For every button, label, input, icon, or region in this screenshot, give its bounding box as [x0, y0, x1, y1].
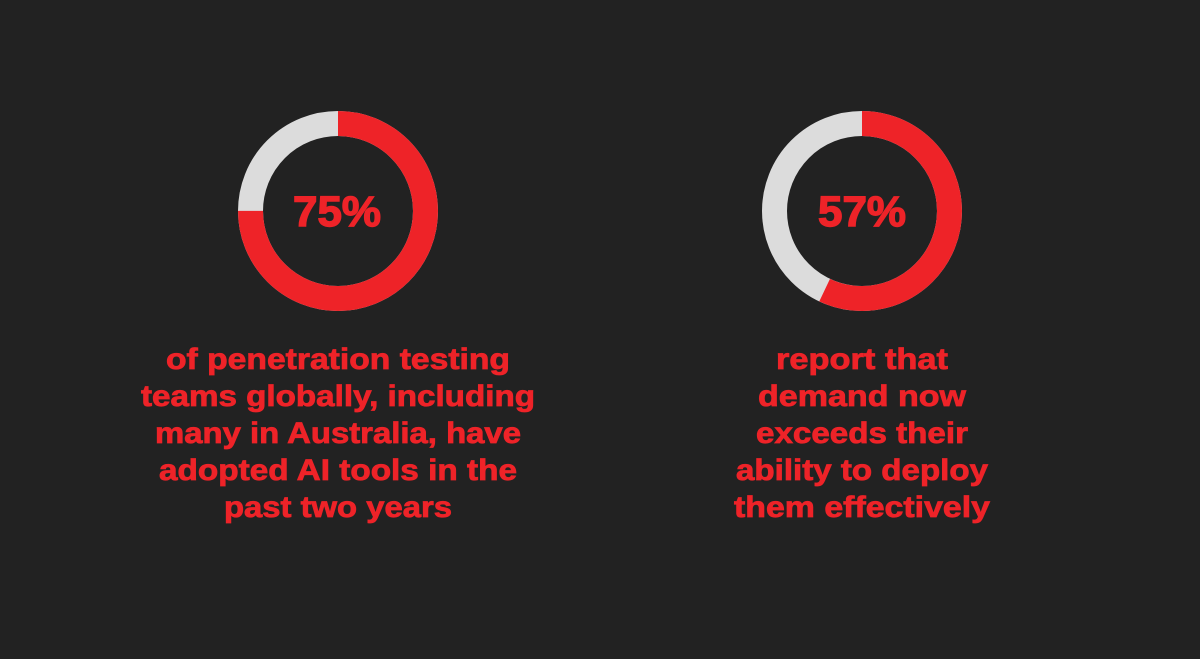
value: 57%: 57%	[818, 188, 906, 236]
description: 57% statistic: ability to deploy	[736, 454, 988, 487]
description: 75% statistic: adopted AI tools in the	[159, 454, 517, 487]
description: 75% statistic: teams globally, including	[141, 380, 535, 413]
description: 75% statistic: of penetration testing	[166, 343, 510, 376]
description: 57% statistic: report that	[776, 343, 948, 376]
value: 75%: 75%	[293, 188, 381, 236]
donut chart: 57%	[774, 124, 950, 298]
description: 57% statistic: demand now	[758, 380, 967, 413]
description: 75% statistic: many in Australia, have	[155, 417, 521, 450]
description: 75% statistic: past two years	[224, 491, 452, 524]
description: 75% statistic	[141, 343, 535, 524]
panel: 57 percent statistic	[734, 124, 990, 524]
panel: 75 percent statistic	[141, 124, 535, 524]
description: 57% statistic: exceeds their	[756, 417, 968, 450]
description: 57% statistic: them effectively	[734, 491, 990, 524]
description: 57% statistic	[734, 343, 990, 524]
donut chart: 75%	[250, 124, 426, 298]
